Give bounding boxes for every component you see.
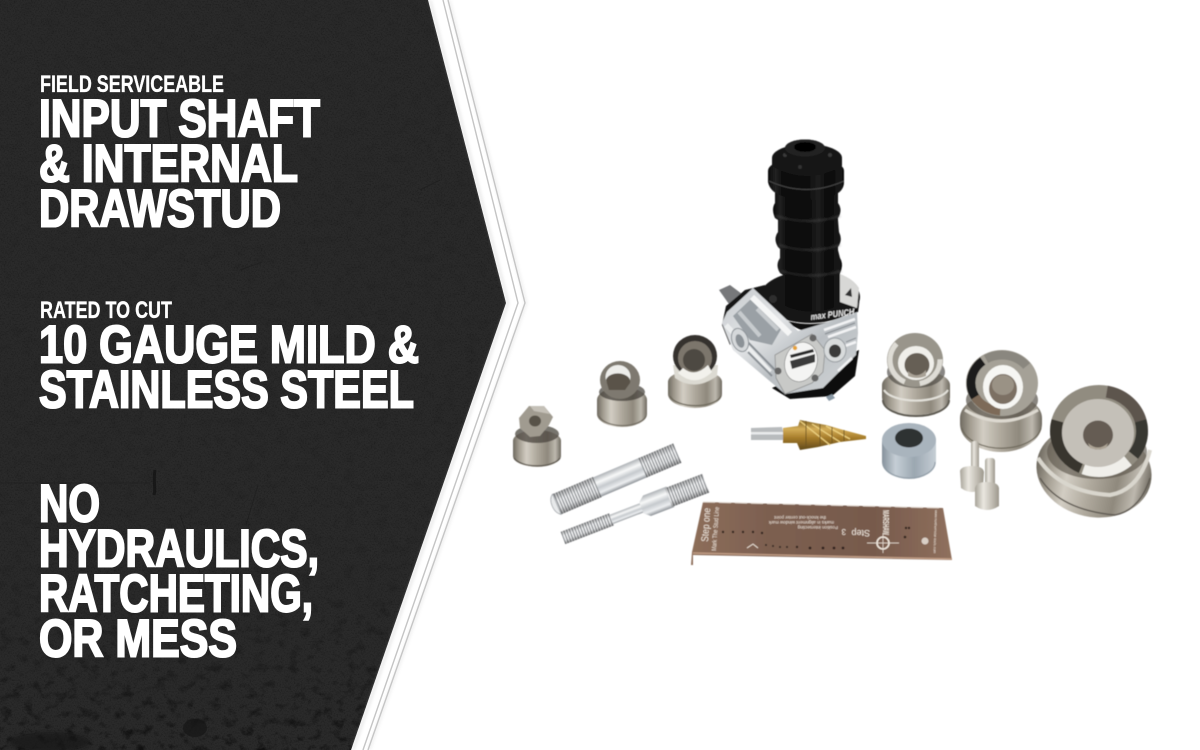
text block: field serviceable input shaft (39, 71, 320, 238)
max punch tool (719, 140, 860, 401)
copper template gauge: marks in alignment window mark (768, 520, 834, 525)
chevron outline strokes (353, 0, 526, 750)
text block: rated to cut: RATED TO CUT (40, 297, 172, 324)
punch 4 (882, 333, 950, 416)
text block: no hydraulics: HYDRAULICS, (39, 520, 319, 578)
text block: field serviceable input shaft: FIELD SERVICEABLE (40, 71, 224, 98)
text block: no hydraulics: OR MESS (39, 610, 237, 668)
text block: no hydraulics (39, 474, 319, 668)
text block: no hydraulics: NO (39, 474, 100, 534)
punch small (513, 406, 561, 467)
panel: dark arrow (0, 0, 520, 750)
text block: rated to cut: STAINLESS STEEL (39, 360, 414, 420)
spacer ring (882, 423, 936, 479)
drawstud stepped (559, 473, 710, 548)
punch 3 (668, 335, 722, 408)
text block: rated to cut: 10 GAUGE MILD & (39, 316, 419, 374)
copper template gauge: Position intersecting (797, 525, 838, 530)
text block: field serviceable input shaft: & INTERNAL (39, 134, 298, 194)
text block: field serviceable input shaft: DRAWSTUD (39, 180, 281, 238)
product kit (513, 140, 1160, 565)
copper template gauge: MARSHAW (881, 510, 890, 535)
nameplate (780, 338, 822, 386)
punch 6 (1028, 385, 1160, 528)
punch 5 (960, 350, 1042, 452)
step drill bit (751, 420, 866, 450)
copper template gauge: 3 (841, 527, 846, 536)
copper template gauge: Mark The Stud Line (711, 506, 721, 551)
copper template gauge: the knock-out center point (773, 515, 826, 520)
copper template gauge: Step one (700, 507, 713, 542)
text block: field serviceable input shaft: INPUT SHAFT (39, 90, 320, 148)
text block: no hydraulics: RATCHETING, (39, 564, 313, 624)
text block: rated to cut (39, 297, 419, 420)
punch 2 (597, 361, 647, 427)
drawstud large (548, 443, 682, 516)
pilot pins (960, 441, 999, 510)
brand text: max PUNCH (810, 307, 855, 322)
copper template gauge (691, 502, 952, 565)
black column (773, 192, 842, 312)
copper template gauge: Step (851, 528, 870, 538)
copper template gauge: www.northernstar-tools.com (932, 510, 938, 554)
